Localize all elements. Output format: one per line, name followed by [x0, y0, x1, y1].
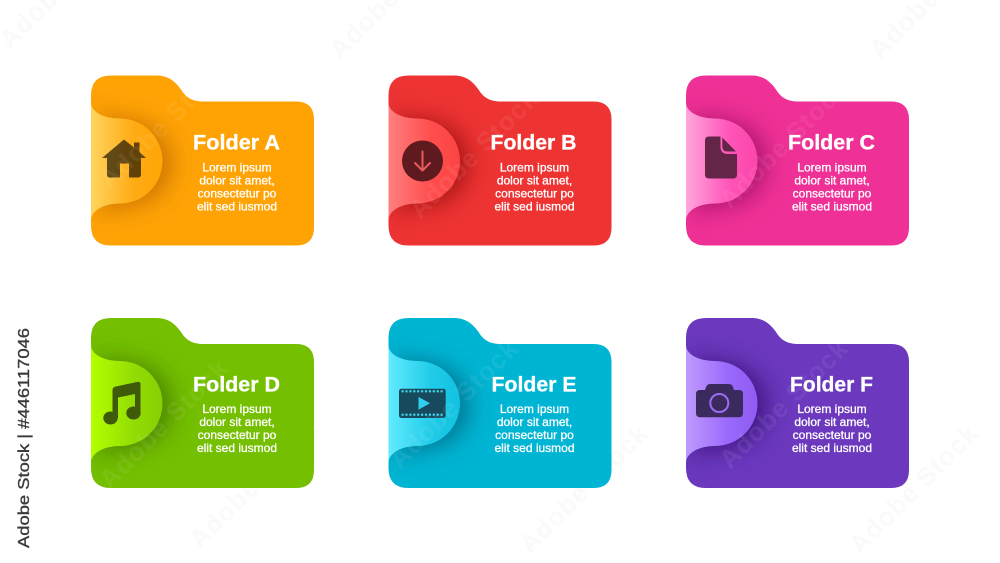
folder A text: consectetur po: [198, 186, 277, 200]
folder F semicircle tab: [686, 345, 758, 463]
folder F heading: Folder F: [790, 374, 873, 396]
folder D tab shadow: [100, 347, 172, 465]
folder watermark: Adobe Stock: [93, 353, 234, 494]
folder B body: [388, 76, 612, 246]
folder E semicircle tab: [388, 345, 460, 463]
folder F: [686, 318, 909, 488]
folder C: [686, 76, 909, 246]
folder E: [388, 318, 612, 488]
folder A text: Lorem ipsum: [202, 160, 272, 174]
folder E text: elit sed iusmod: [494, 441, 575, 455]
folder E text: dolor sit amet,: [497, 415, 572, 429]
folder A tab shadow: [100, 104, 172, 222]
folder B text: Lorem ipsum: [500, 160, 569, 174]
folder C text: dolor sit amet,: [794, 174, 870, 188]
folder watermark: Adobe Stock: [403, 83, 544, 224]
folder C text: Lorem ipsum: [797, 160, 867, 174]
folder A heading: Folder A: [193, 132, 280, 154]
folder A: [91, 76, 314, 246]
folder watermark: Adobe Stock: [713, 333, 854, 474]
folder B tab shadow: [398, 104, 469, 222]
folder D heading: Folder D: [193, 374, 280, 396]
folder B heading: Folder B: [490, 132, 576, 154]
folder F tab shadow: [695, 347, 766, 465]
icon: camera: [696, 384, 743, 417]
folder watermark: [93, 53, 854, 494]
folder A text: elit sed iusmod: [197, 200, 277, 214]
folder D: [91, 318, 314, 488]
folder F text: consectetur po: [793, 428, 872, 442]
stock id caption: Adobe Stock | #446117046: [16, 328, 33, 548]
folder watermark: Adobe Stock: [93, 53, 234, 194]
folder C tab shadow: [695, 104, 766, 222]
folder E heading: Folder E: [492, 374, 576, 396]
icon: home: [102, 140, 146, 178]
folder A body: [91, 76, 314, 246]
folder watermark: Adobe Stock: [713, 73, 854, 214]
background watermark: Adobe Stock: [183, 413, 324, 554]
background watermark: Adobe Stock: [843, 418, 984, 559]
folder C text: consectetur po: [793, 186, 872, 200]
folder A text: dolor sit amet,: [199, 174, 275, 188]
folder D text: consectetur po: [198, 428, 277, 442]
folder E tab shadow: [398, 347, 469, 465]
folder D text: Lorem ipsum: [202, 402, 272, 416]
folder watermark: Adobe Stock: [383, 333, 524, 474]
folder C heading: Folder C: [788, 132, 875, 154]
folder D body: [91, 318, 314, 488]
folder A semicircle tab: [91, 102, 162, 220]
folder E text: consectetur po: [495, 428, 574, 442]
icon: film strip: [399, 389, 446, 418]
folder B semicircle tab: [388, 102, 460, 220]
icon: file: [705, 136, 737, 178]
background watermark: Adobe Stock: [513, 418, 654, 559]
folder F text: Lorem ipsum: [797, 402, 867, 416]
folder F text: dolor sit amet,: [794, 415, 870, 429]
icon: music note: [103, 382, 141, 424]
folder B text: consectetur po: [495, 186, 574, 200]
folder E text: Lorem ipsum: [500, 402, 569, 416]
folder B text: dolor sit amet,: [497, 174, 572, 188]
folder C text: elit sed iusmod: [792, 200, 872, 214]
folder D text: elit sed iusmod: [197, 441, 277, 455]
folder C semicircle tab: [686, 102, 758, 220]
folder E body: [388, 318, 612, 488]
folder D text: dolor sit amet,: [199, 415, 275, 429]
folder F body: [686, 318, 909, 488]
folder B: [388, 76, 612, 246]
folder C body: [686, 76, 909, 246]
icon: download: [402, 140, 443, 182]
folder F text: elit sed iusmod: [792, 441, 872, 455]
folder D semicircle tab: [91, 345, 162, 463]
folder B text: elit sed iusmod: [494, 200, 575, 214]
